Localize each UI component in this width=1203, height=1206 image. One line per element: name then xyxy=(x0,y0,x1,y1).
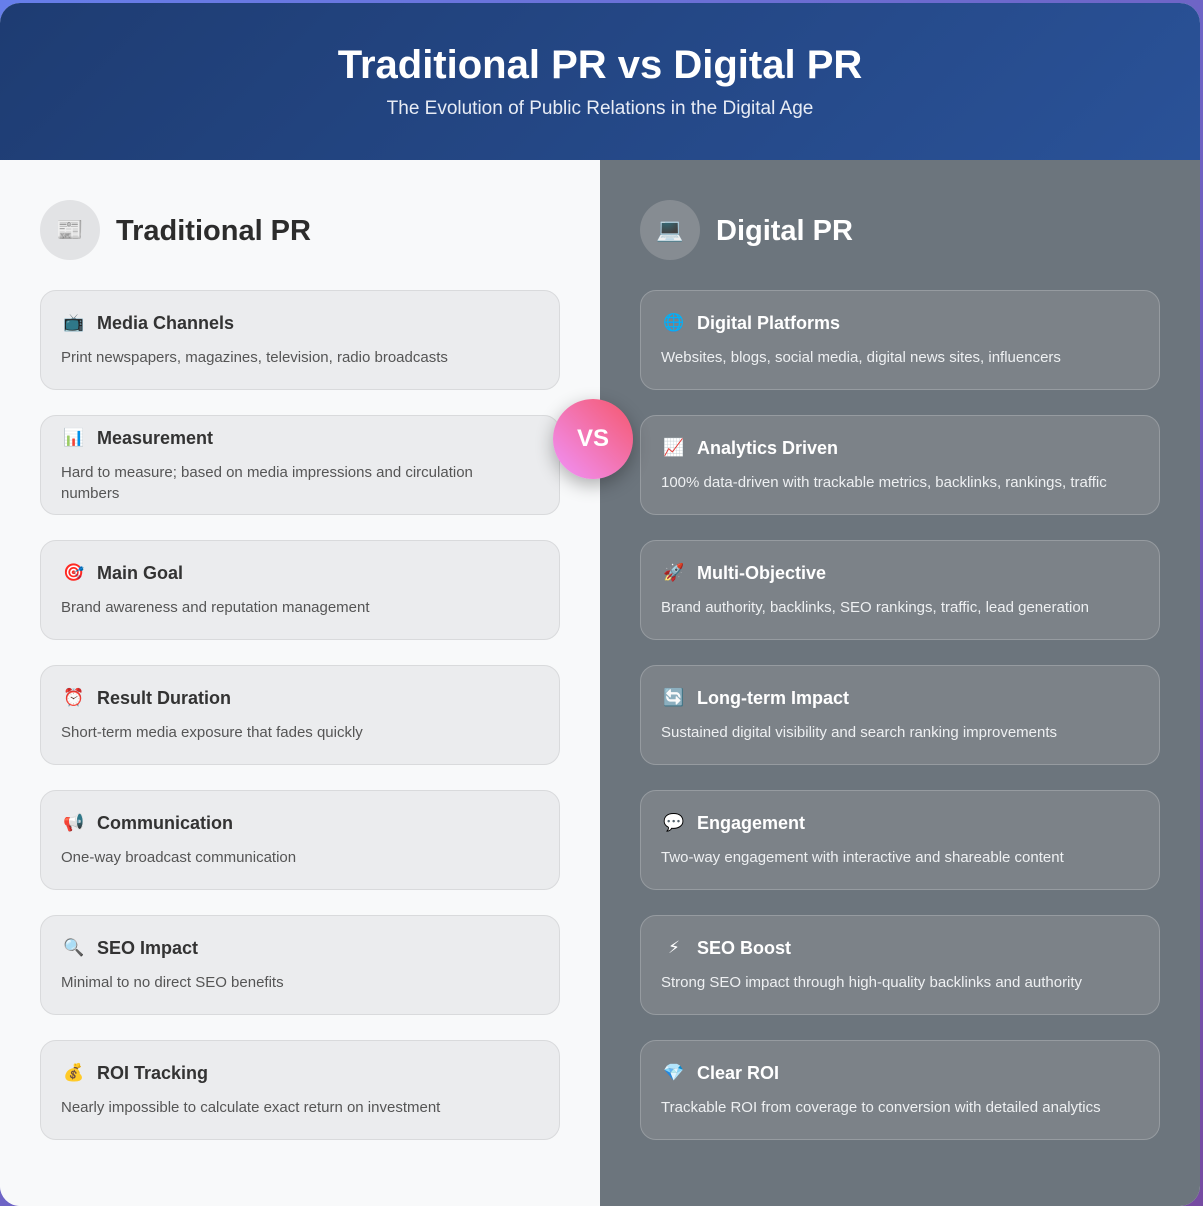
card: clear ROI: Clear ROI xyxy=(697,1063,779,1083)
card: analytics driven: Analytics Driven xyxy=(697,438,838,458)
card: communication xyxy=(40,790,560,890)
section heading: traditional xyxy=(40,200,311,260)
card: main goal xyxy=(40,540,560,640)
card: result duration: Result Duration xyxy=(97,688,231,708)
card: analytics driven xyxy=(640,415,1160,515)
card: engagement xyxy=(640,790,1160,890)
section heading: digital: 💻 xyxy=(656,217,684,242)
card: SEO impact: SEO Impact xyxy=(97,938,198,958)
card: SEO boost xyxy=(640,915,1160,1015)
section heading: traditional: Traditional PR xyxy=(116,215,311,247)
card: analytics driven: 📈 xyxy=(663,438,685,457)
card: SEO impact: Minimal to no direct SEO benefits xyxy=(61,974,284,991)
card: media channels: Print newspapers, magazines, television, radio broadcasts xyxy=(61,349,448,366)
card: multi-objective: Multi-Objective xyxy=(697,563,826,583)
card: clear ROI xyxy=(640,1040,1160,1140)
card: media channels: Media Channels xyxy=(97,313,234,333)
card: SEO impact: 🔍 xyxy=(63,938,85,957)
card: communication: One-way broadcast communication xyxy=(61,849,296,866)
card: digital platforms xyxy=(640,290,1160,390)
card: result duration xyxy=(40,665,560,765)
card: main goal: Main Goal xyxy=(97,563,183,583)
card: measurement: Hard to measure; based on media impressions and circulation numbers xyxy=(61,464,473,502)
card: long-term impact xyxy=(640,665,1160,765)
card: engagement: Engagement xyxy=(697,813,805,833)
card: digital platforms: Digital Platforms xyxy=(697,313,840,333)
card: multi-objective xyxy=(640,540,1160,640)
card: measurement xyxy=(40,415,560,515)
header xyxy=(0,3,1200,160)
VS badge: VS xyxy=(577,425,609,452)
card: SEO boost: Strong SEO impact through high-quality backlinks and authority xyxy=(661,974,1082,991)
card: engagement: 💬 xyxy=(663,813,685,832)
VS badge xyxy=(553,399,633,479)
card: SEO boost: ⚡ xyxy=(668,938,680,957)
card: clear ROI: Trackable ROI from coverage to conversion with detailed analytics xyxy=(661,1099,1101,1116)
card: result duration: Short-term media exposure that fades quickly xyxy=(61,724,363,741)
card: multi-objective: 🚀 xyxy=(663,563,685,582)
card: media channels: 📺 xyxy=(63,313,85,332)
card: measurement: 📊 xyxy=(63,428,85,446)
section heading: digital xyxy=(640,200,853,260)
card: result duration: ⏰ xyxy=(63,688,85,707)
card: clear ROI: 💎 xyxy=(663,1063,685,1082)
section heading: traditional: 📰 xyxy=(56,217,84,242)
card: engagement: Two-way engagement with interactive and shareable content xyxy=(661,849,1064,866)
card: SEO impact xyxy=(40,915,560,1015)
card: analytics driven: 100% data-driven with trackable metrics, backlinks, rankings, traffic xyxy=(661,474,1107,491)
card: main goal: 🎯 xyxy=(63,563,85,582)
card: long-term impact: Sustained digital visibility and search ranking improvements xyxy=(661,724,1057,741)
card: multi-objective: Brand authority, backlinks, SEO rankings, traffic, lead generation xyxy=(661,599,1089,616)
card: media channels xyxy=(40,290,560,390)
card: main goal: Brand awareness and reputation management xyxy=(61,599,370,616)
card: ROI tracking: 💰 xyxy=(63,1063,85,1082)
panel: traditional PR xyxy=(0,160,600,1206)
card: ROI tracking xyxy=(40,1040,560,1140)
card: communication: Communication xyxy=(97,813,233,833)
card: ROI tracking: ROI Tracking xyxy=(97,1063,208,1083)
card: measurement: Measurement xyxy=(97,428,213,448)
panel: digital PR xyxy=(600,160,1200,1206)
card: digital platforms: Websites, blogs, social media, digital news sites, influencers xyxy=(661,349,1061,366)
section heading: digital: Digital PR xyxy=(716,215,853,247)
card: long-term impact: 🔄 xyxy=(663,688,685,707)
title: Traditional PR vs Digital PR xyxy=(338,43,862,87)
card: ROI tracking: Nearly impossible to calculate exact return on investment xyxy=(61,1099,440,1116)
card: communication: 📢 xyxy=(63,813,85,832)
subtitle: The Evolution of Public Relations in the Digital Age xyxy=(387,98,813,119)
card: SEO boost: SEO Boost xyxy=(697,938,791,958)
card: digital platforms: 🌐 xyxy=(663,313,685,332)
card: long-term impact: Long-term Impact xyxy=(697,688,849,708)
